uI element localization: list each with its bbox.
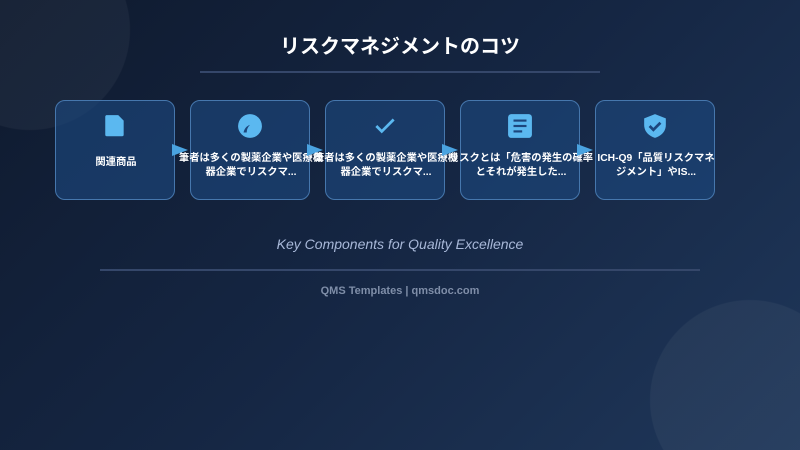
- card 2: [190, 100, 310, 200]
- card 5: [595, 100, 715, 200]
- text: ICH-Q9「品質リスクマネ: [597, 153, 715, 164]
- text: [179, 152, 323, 178]
- icon: check: [376, 118, 394, 134]
- text: 器企業でリスクマ...: [206, 167, 296, 178]
- arrow 3: [442, 144, 458, 156]
- arrow 4: [577, 144, 593, 156]
- subtitle: Key Components for Quality Excellence: [277, 236, 523, 252]
- icon: leaf circle: [238, 114, 262, 138]
- arrow 2: [307, 144, 323, 156]
- text: リスクとは「危害の発生の確率: [449, 153, 593, 164]
- text: 筆者は多くの製薬企業や医療機: [179, 153, 323, 164]
- text: とそれが発生した...: [476, 167, 566, 178]
- text: 器企業でリスクマ...: [341, 167, 431, 178]
- icon: document: [105, 115, 124, 136]
- text: [449, 152, 593, 178]
- icon: shield check: [644, 114, 666, 138]
- text: 筆者は多くの製薬企業や医療機: [314, 153, 458, 164]
- text: 関連商品: [95, 157, 137, 168]
- text: ジメント」やIS...: [616, 167, 696, 178]
- arrow 1: [172, 144, 188, 156]
- card 3: [325, 100, 445, 200]
- footer: QMS Templates | qmsdoc.com: [321, 285, 479, 297]
- card 1: [55, 100, 175, 200]
- text: [597, 152, 715, 178]
- text: [314, 152, 458, 178]
- icon: article: [508, 114, 532, 138]
- title: リスクマネジメントのコツ: [280, 36, 520, 58]
- card 4: [460, 100, 580, 200]
